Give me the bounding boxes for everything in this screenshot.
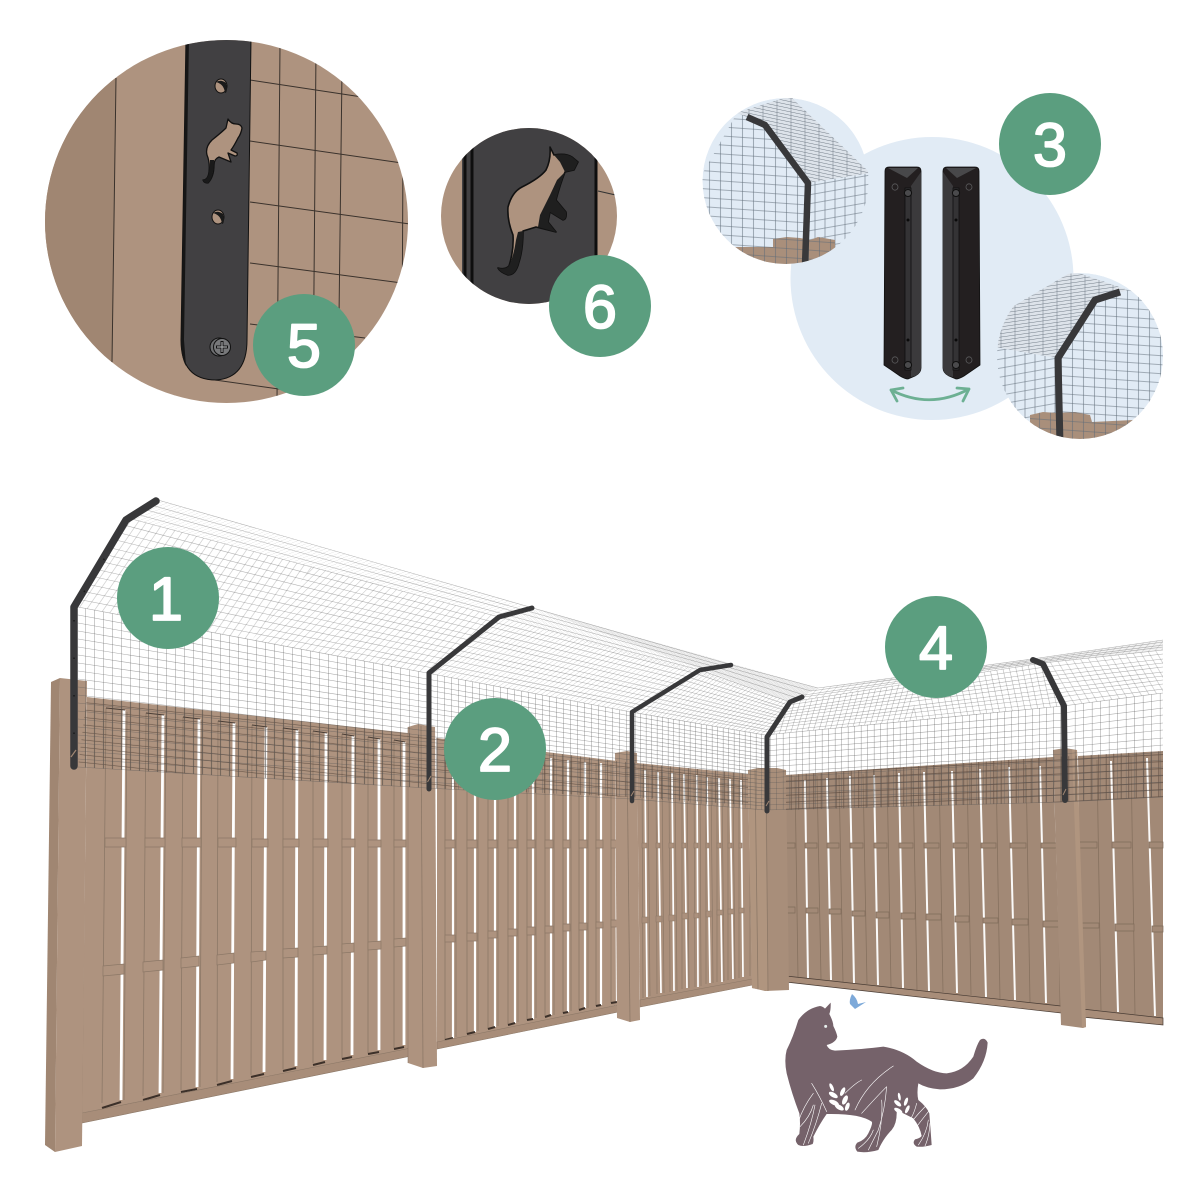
badge 4: 4 (919, 614, 953, 682)
icon: butterfly (850, 994, 866, 1009)
fence top (736, 237, 835, 264)
badge 3 (999, 93, 1101, 195)
roof netting (995, 271, 1128, 358)
badge 1 (117, 547, 219, 649)
fence post 3 (615, 751, 640, 1022)
bracket 2 (428, 608, 532, 789)
badge 2: 2 (478, 716, 512, 784)
badge 6 (549, 255, 651, 357)
badge 4 (885, 596, 987, 698)
panel: fence with net (45, 500, 1163, 1152)
bracket 3 (631, 665, 731, 801)
icon: left bracket (884, 167, 921, 379)
bracket strip with cat cutout (181, 38, 251, 380)
fence section 2 (437, 738, 618, 1045)
bottom rail section 3 (640, 977, 763, 1007)
panel: bracket bent one way (700, 96, 870, 270)
icon: cat silhouette with grass (785, 1003, 988, 1152)
panel: bracket close-up with screw (40, 38, 410, 405)
corner post (748, 768, 789, 991)
icon: right bracket (943, 167, 980, 379)
bottom rail section 2 (437, 1003, 628, 1049)
roof netting (737, 96, 870, 183)
panel: reversible bracket background (790, 137, 1074, 420)
fence left section 1 (82, 697, 408, 1113)
panel: cat cutout close-up (441, 125, 620, 310)
fence section 3 (637, 763, 755, 1003)
net: right roof and wall (765, 640, 1163, 810)
fence post 1 (45, 678, 87, 1152)
bottom rail section 1 (82, 1046, 421, 1123)
bottom rail right section (786, 976, 1163, 1025)
badge 3: 3 (1033, 111, 1067, 179)
panel: bracket bent other way (995, 271, 1170, 445)
arrow: flip between brackets (891, 388, 969, 401)
badge 5 (253, 294, 355, 396)
badge 6: 6 (583, 273, 617, 341)
bracket 4 (766, 697, 802, 811)
net band over fence (78, 697, 1163, 810)
net: left roof and wall (78, 500, 818, 810)
fence post 2 (408, 724, 437, 1068)
bracket 1 (71, 501, 156, 766)
fence post right (1053, 748, 1086, 1028)
fence top (1030, 412, 1133, 439)
bracket 5 (1033, 660, 1066, 800)
badge 5: 5 (287, 312, 321, 380)
fence right section (785, 751, 1163, 1018)
badge 2 (444, 698, 546, 800)
badge 1: 1 (149, 565, 183, 633)
